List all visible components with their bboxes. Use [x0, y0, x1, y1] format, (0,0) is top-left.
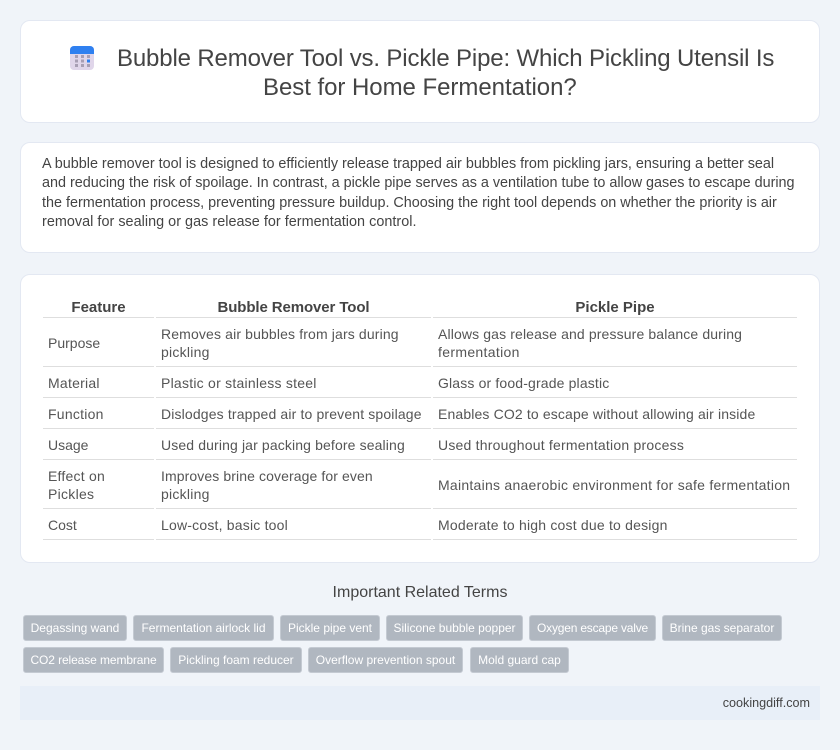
- row: function: [48, 406, 755, 422]
- related terms tags: CO2 release membrane: [30, 653, 157, 667]
- related terms heading: Important Related Terms: [333, 584, 507, 601]
- related terms tags: Fermentation airlock lid: [141, 621, 266, 635]
- icon: calendar: [70, 46, 94, 70]
- row: function: Enables CO2 to escape without allowing air inside: [438, 406, 755, 422]
- related terms tags: Pickling foam reducer: [178, 653, 294, 667]
- row: purpose: [48, 326, 742, 360]
- row: function: Function: [48, 406, 104, 422]
- table header: Feature: [71, 299, 126, 316]
- related terms tags: Silicone bubble popper: [393, 621, 516, 635]
- row: cost: Cost: [48, 517, 77, 533]
- row: effect on pickles: Improves brine coverage for even: [161, 468, 373, 484]
- title: Bubble Remover Tool vs. Pickle Pipe: Which Pickling Utensil Is: [117, 45, 774, 72]
- header card: [20, 20, 820, 123]
- intro text panel: [20, 142, 820, 253]
- related terms tags: Oxygen escape valve: [537, 621, 648, 635]
- footer source: cookingdiff.com: [723, 696, 810, 710]
- row: material: Glass or food-grade plastic: [438, 375, 609, 391]
- related terms tags: [23, 615, 782, 673]
- title: Best for Home Fermentation?: [263, 74, 577, 101]
- row: usage: Used throughout fermentation process: [438, 437, 684, 453]
- row: effect on pickles: [48, 468, 790, 502]
- title: [117, 45, 774, 101]
- related terms tags: Brine gas separator: [670, 621, 774, 635]
- row: purpose: Allows gas release and pressure balance during: [438, 326, 742, 342]
- intro paragraph: removal for sealing or gas release for fermentation control.: [42, 214, 417, 230]
- row: purpose: pickling: [161, 344, 210, 360]
- row: purpose: Removes air bubbles from jars during: [161, 326, 399, 342]
- table header: Bubble Remover Tool: [217, 299, 370, 316]
- row: cost: Low-cost, basic tool: [161, 517, 288, 533]
- row: cost: Moderate to high cost due to design: [438, 517, 668, 533]
- row: function: Dislodges trapped air to prevent spoilage: [161, 406, 422, 422]
- row: purpose: fermentation: [438, 344, 520, 360]
- row: effect on pickles: Pickles: [48, 486, 94, 502]
- row: effect on pickles: Maintains anaerobic environment for safe fermentation: [438, 477, 790, 493]
- row: effect on pickles: Effect on: [48, 468, 105, 484]
- related terms tags: Pickle pipe vent: [288, 621, 372, 635]
- table header: Pickle Pipe: [575, 299, 655, 316]
- row: purpose: Purpose: [48, 335, 100, 351]
- intro paragraph: the fermentation process, preventing pressure buildup. Choosing the right tool depends on whether the priority is air: [42, 195, 777, 211]
- intro paragraph: and reducing the risk of spoilage. In contrast, a pickle pipe serves as a ventilation tube to allow gases to escape during: [42, 175, 795, 191]
- row: material: Plastic or stainless steel: [161, 375, 317, 391]
- row: usage: Used during jar packing before sealing: [161, 437, 405, 453]
- row: material: Material: [48, 375, 100, 391]
- row: material: [48, 375, 609, 391]
- intro paragraph: A bubble remover tool is designed to efficiently release trapped air bubbles from pickling jars, ensuring a better seal: [42, 156, 774, 172]
- row: effect on pickles: pickling: [161, 486, 210, 502]
- row: usage: Usage: [48, 437, 88, 453]
- intro paragraph: [42, 156, 795, 230]
- related terms tags: Degassing wand: [31, 621, 119, 635]
- comparison table panel: [20, 274, 820, 563]
- related terms tags: Mold guard cap: [478, 653, 561, 667]
- footer bar: [20, 686, 820, 720]
- row: usage: [48, 437, 684, 453]
- related terms tags: Overflow prevention spout: [316, 653, 455, 667]
- row: cost: [48, 517, 668, 533]
- table header: [71, 299, 655, 316]
